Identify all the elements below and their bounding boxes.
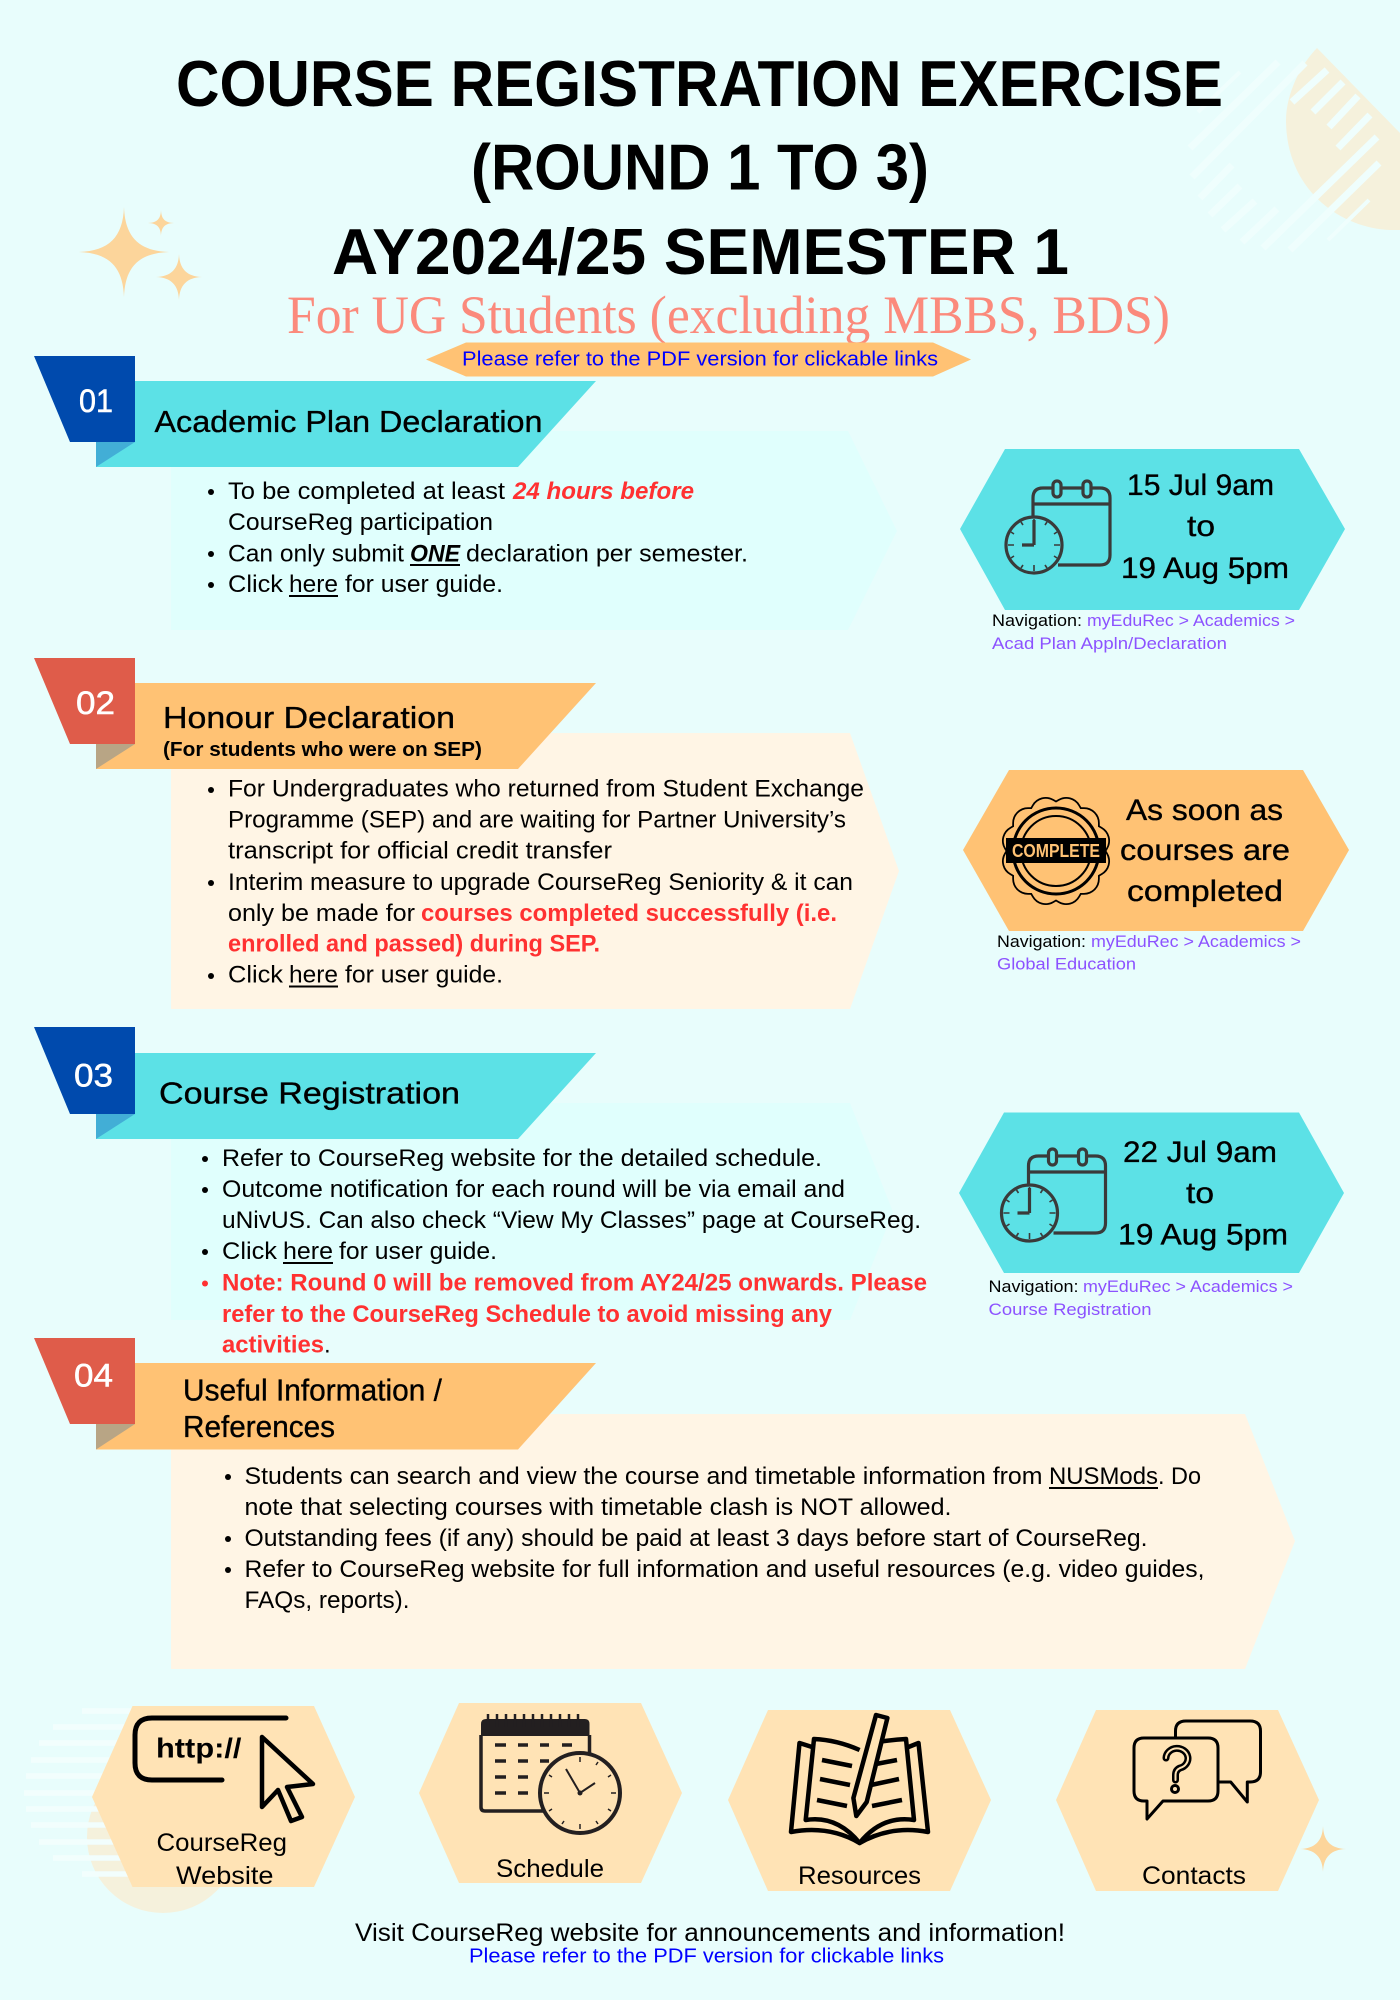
link tile: contacts bbox=[1056, 1710, 1319, 1891]
bullet list: section 03: here bbox=[283, 1238, 333, 1265]
title: AY2024/25 SEMESTER 1 bbox=[332, 215, 1069, 288]
link tile: schedule bbox=[419, 1703, 682, 1883]
date hexagon: section 02 bbox=[963, 770, 1349, 931]
header: section 01 bbox=[34, 356, 596, 467]
bullet list: section 04 bbox=[225, 1463, 1204, 1614]
navigation note: section 03: Navigation: bbox=[988, 1277, 1078, 1296]
subtitle: For UG Students (excluding MBBS, BDS) bbox=[287, 285, 1170, 345]
bullet list: section 03: Refer to CourseReg website for the detailed schedule. bbox=[222, 1145, 822, 1172]
date hexagon: section 02: As soon as bbox=[1126, 794, 1283, 827]
link tile: contacts: Contacts bbox=[1142, 1862, 1246, 1890]
navigation note: section 03 bbox=[988, 1277, 1293, 1319]
icon: complete badge: COMPLETE bbox=[1012, 841, 1100, 861]
bullet list: section 02: enrolled and passed) during SEP. bbox=[228, 930, 600, 958]
bullet list: section 03: Click bbox=[222, 1238, 278, 1265]
header: section 03: Course Registration bbox=[159, 1076, 460, 1110]
bullet list: section 04: NUSMods bbox=[1049, 1463, 1158, 1490]
header: section 04: Useful Information / bbox=[183, 1372, 442, 1408]
bullet list: section 02: Click bbox=[228, 962, 284, 988]
date hexagon: section 03: 22 Jul 9am bbox=[1123, 1136, 1277, 1169]
bullet list: section 02: Programme (SEP) and are waiting for Partner University’s bbox=[228, 806, 846, 834]
bullet list: section 01 bbox=[208, 478, 748, 598]
title: COURSE REGISTRATION EXERCISE bbox=[176, 47, 1223, 120]
header: section 01: 01 bbox=[79, 383, 113, 419]
date hexagon: section 01 bbox=[960, 449, 1345, 610]
link tile: CourseReg website: Website bbox=[176, 1862, 274, 1890]
bullet list: section 01: CourseReg participation bbox=[228, 509, 493, 536]
header: section 03: 03 bbox=[74, 1058, 113, 1094]
title: (ROUND 1 TO 3) bbox=[471, 130, 929, 204]
header: section 02: (For students who were on SEP) bbox=[163, 739, 482, 761]
header: section 03 bbox=[34, 1027, 596, 1139]
bullet list: section 02: only be made for bbox=[228, 900, 415, 927]
link tile: CourseReg website: CourseReg bbox=[156, 1829, 287, 1857]
bullet list: section 04: Students can search and view the course and timetable information from bbox=[244, 1463, 1042, 1490]
icon: http cursor bbox=[135, 1718, 313, 1821]
icon: calendar and clock bbox=[1002, 1149, 1106, 1241]
navigation note: section 01 bbox=[992, 611, 1295, 653]
footer text: Please refer to the PDF version for clickable links bbox=[469, 1946, 944, 1968]
banner: PDF note bbox=[426, 342, 971, 376]
panel: section 04 body bbox=[171, 1414, 1295, 1669]
bullet list: section 03: Note: Round 0 will be removed from AY24/25 onwards. Please bbox=[222, 1270, 927, 1296]
title bbox=[176, 47, 1223, 288]
bullet list: section 03: refer to the CourseReg Schedule to avoid missing any bbox=[222, 1301, 833, 1328]
date hexagon: section 02: completed bbox=[1127, 875, 1283, 908]
bullet list: section 02: For Undergraduates who returned from Student Exchange bbox=[228, 776, 864, 802]
bullet list: section 01: Click bbox=[228, 571, 284, 598]
navigation note: section 02: myEduRec > Academics > bbox=[1091, 932, 1301, 951]
footer text: Visit CourseReg website for announcements and information! bbox=[355, 1919, 1065, 1947]
bullet list: section 04: Refer to CourseReg website for full information and useful resources (e.g. video guides, bbox=[244, 1556, 1204, 1583]
link tile: CourseReg website bbox=[92, 1706, 355, 1890]
panel: section 01 body bbox=[171, 431, 897, 630]
icon: http cursor: http:// bbox=[156, 1732, 242, 1764]
navigation note: section 01: myEduRec > Academics > bbox=[1087, 611, 1295, 630]
bullet list: section 02: for user guide. bbox=[345, 962, 503, 988]
link tile: schedule: Schedule bbox=[496, 1855, 604, 1883]
header: section 04: References bbox=[183, 1409, 335, 1444]
bullet list: section 03 bbox=[202, 1145, 927, 1358]
bullet list: section 02: here bbox=[289, 962, 338, 988]
navigation note: section 01: Acad Plan Appln/Declaration bbox=[992, 634, 1227, 653]
bullet list: section 04: FAQs, reports). bbox=[244, 1587, 410, 1614]
bullet list: section 03: Outcome notification for each round will be via email and bbox=[222, 1176, 845, 1203]
header: section 04 bbox=[34, 1338, 596, 1450]
header: section 02: 02 bbox=[76, 685, 115, 721]
decoration: sparkle bottom right bbox=[1300, 1826, 1346, 1872]
panel: section 03 body bbox=[171, 1103, 927, 1358]
icon: complete badge bbox=[999, 794, 1113, 908]
bullet list: section 04: . Do bbox=[1158, 1463, 1201, 1490]
date hexagon: section 02: courses are bbox=[1120, 834, 1290, 867]
bullet list: section 01: for user guide. bbox=[345, 571, 503, 598]
bullet list: section 02: courses completed successfully (i.e. bbox=[421, 900, 837, 927]
date hexagon: section 01: to bbox=[1187, 510, 1215, 543]
bullet list: section 01: Can only submit bbox=[228, 540, 404, 568]
date hexagon: section 03 bbox=[959, 1112, 1344, 1273]
decoration: top right leaf with stripes bbox=[1190, 48, 1400, 250]
icon: calendar and clock bbox=[1006, 481, 1110, 573]
decoration: bottom left circle with stripes bbox=[24, 1711, 239, 1913]
header: section 04: 04 bbox=[74, 1358, 113, 1394]
bullet list: section 03: for user guide. bbox=[339, 1238, 497, 1265]
header: section 02 bbox=[34, 658, 596, 769]
decoration: sparkles top left bbox=[79, 207, 202, 300]
navigation note: section 03: Course Registration bbox=[988, 1300, 1152, 1319]
icon: speech bubbles with question mark bbox=[1134, 1721, 1260, 1819]
banner: PDF note: Please refer to the PDF version for clickable links bbox=[462, 348, 938, 370]
bullet list: section 04: Outstanding fees (if any) should be paid at least 3 days before start of CourseReg. bbox=[244, 1525, 1148, 1552]
date hexagon: section 01: 19 Aug 5pm bbox=[1121, 552, 1289, 585]
date hexagon: section 01: 15 Jul 9am bbox=[1127, 469, 1274, 502]
date hexagon: section 03: 19 Aug 5pm bbox=[1118, 1218, 1288, 1252]
link tile: resources bbox=[728, 1710, 991, 1891]
header: section 01: Academic Plan Declaration bbox=[154, 404, 542, 439]
bullet list: section 02: transcript for official credit transfer bbox=[228, 838, 612, 864]
bullet list: section 03: activities bbox=[222, 1332, 324, 1358]
bullet list: section 01: ONE bbox=[410, 540, 461, 568]
date hexagon: section 03: to bbox=[1186, 1177, 1214, 1210]
icon: calendar with clock bbox=[481, 1714, 620, 1833]
icon: open book with pencil bbox=[791, 1715, 928, 1843]
bullet list: section 01: here bbox=[289, 571, 338, 598]
header: section 02: Honour Declaration bbox=[163, 700, 455, 735]
navigation note: section 02: Global Education bbox=[997, 954, 1136, 974]
bullet list: section 02 bbox=[208, 776, 864, 988]
footer text bbox=[355, 1919, 1065, 1968]
navigation note: section 01: Navigation: bbox=[992, 611, 1082, 630]
bullet list: section 04: note that selecting courses with timetable clash is NOT allowed. bbox=[244, 1494, 952, 1521]
bullet list: section 03: . bbox=[324, 1332, 331, 1358]
navigation note: section 03: myEduRec > Academics > bbox=[1083, 1277, 1293, 1296]
bullet list: section 01: declaration per semester. bbox=[466, 540, 748, 568]
panel: section 02 body bbox=[171, 733, 899, 1009]
navigation note: section 02 bbox=[997, 932, 1301, 974]
bullet list: section 01: 24 hours before bbox=[512, 478, 694, 505]
link tile: resources: Resources bbox=[798, 1862, 921, 1890]
bullet list: section 01: To be completed at least bbox=[228, 478, 505, 505]
bullet list: section 03: uNivUS. Can also check “View My Classes” page at CourseReg. bbox=[222, 1207, 921, 1234]
navigation note: section 02: Navigation: bbox=[997, 932, 1086, 951]
bullet list: section 02: Interim measure to upgrade CourseReg Seniority & it can bbox=[228, 869, 853, 896]
